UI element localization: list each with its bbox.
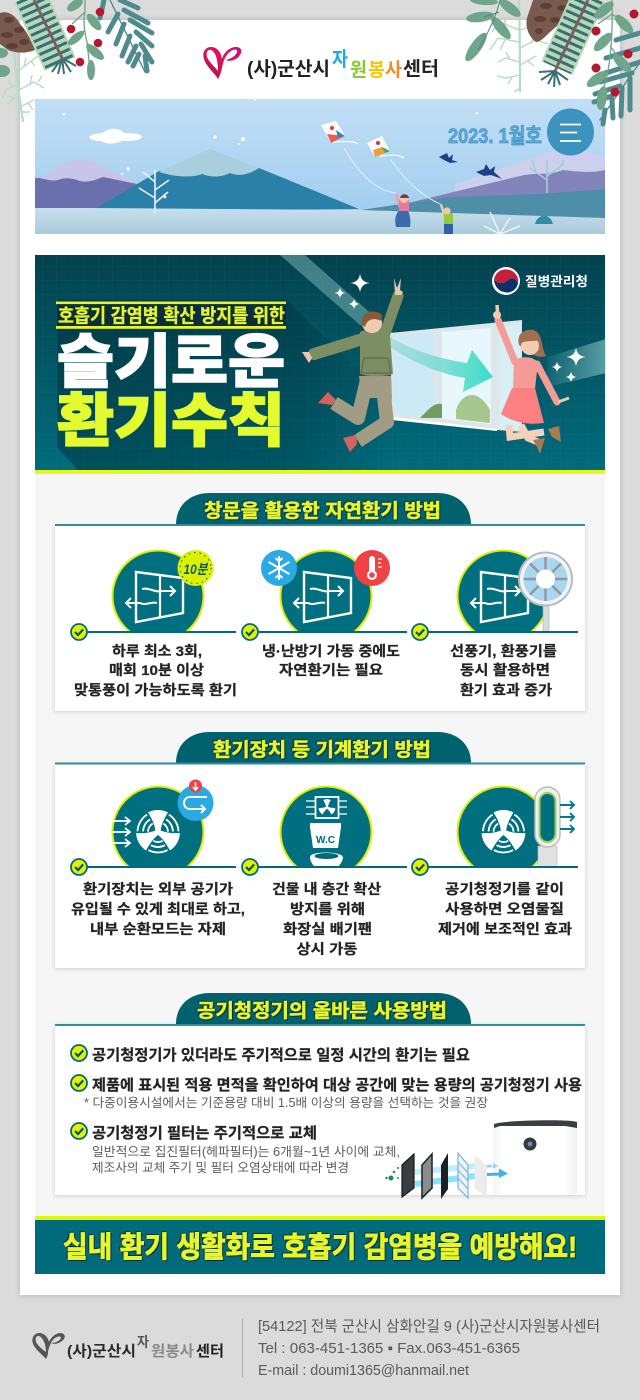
bottom message banner: 실내 환기 생활화로 호흡기 감염병을 예방해요! xyxy=(63,1231,577,1264)
section 2 heading tab xyxy=(176,732,471,763)
footer logo name: 원봉사 xyxy=(151,1343,194,1360)
text: item 1: 하루 최소 3회, xyxy=(112,643,202,659)
pine cone xyxy=(526,0,573,42)
item 2: toilet exhaust circle: W.C xyxy=(316,835,335,846)
footer logo name: (사)군산시 xyxy=(67,1343,136,1360)
text: item 3: 제거에 보조적인 효과 xyxy=(438,921,572,937)
mountains right xyxy=(455,145,605,200)
logo name: 원 xyxy=(350,59,367,81)
icon: 10 minute badge: 10분 xyxy=(184,561,208,577)
berries xyxy=(592,10,638,96)
tree right xyxy=(530,160,564,193)
text: item 1 xyxy=(71,881,245,937)
green sprig xyxy=(65,0,106,80)
text: item 3: 환기 효과 증가 xyxy=(460,682,552,698)
logo name: 센터 xyxy=(403,58,439,80)
title banner xyxy=(35,255,606,474)
text: item 2: 화장실 배기팬 xyxy=(283,921,372,937)
text: item 2: 상시 가동 xyxy=(296,941,358,957)
rule 2: 제품에 표시된 적용 면적을 확인하여 대상 공간에 맞는 용량의 공기청정기 사용 xyxy=(92,1077,582,1094)
kdca logo xyxy=(492,267,588,295)
text: item 2: 건물 내 층간 확산 xyxy=(272,881,381,897)
panel: mechanical ventilation xyxy=(55,762,585,968)
text: item 2: 자연환기는 필요 xyxy=(279,662,383,678)
logo name xyxy=(247,48,439,81)
rule 3 detail xyxy=(92,1145,400,1175)
boy xyxy=(441,205,453,234)
air flow arrows xyxy=(415,1163,508,1184)
footer contact text: E-mail : doumi1365@hanmail.net xyxy=(258,1362,470,1379)
text: item 3: 동시 활용하면 xyxy=(460,662,550,678)
text: item 1: 유입될 수 있게 최대로 하고, xyxy=(71,901,245,917)
text: item 1: 매회 10분 이상 xyxy=(109,662,204,678)
sub title xyxy=(56,301,286,329)
wind arrow xyxy=(390,337,493,392)
main title: yellow: 환기수칙 xyxy=(57,389,285,454)
bottom message banner xyxy=(35,1216,605,1274)
footer contact text xyxy=(258,1318,600,1379)
kite 2 xyxy=(367,136,404,158)
large leaves xyxy=(462,0,523,64)
item 2: toilet exhaust circle xyxy=(280,786,372,878)
dividers and checks row xyxy=(71,624,578,640)
footer xyxy=(32,1318,600,1379)
sub title: 호흡기 감염병 확산 방지를 위한 xyxy=(58,305,285,327)
text: item 2: 냉·난방기 가동 중에도 xyxy=(262,643,400,659)
girl in hanbok xyxy=(395,194,410,227)
sparkles xyxy=(334,274,586,382)
woman jumping xyxy=(493,305,569,454)
footer logo name: 자 xyxy=(137,1334,149,1350)
section 3 heading tab xyxy=(176,993,471,1024)
right beam xyxy=(547,339,606,387)
item 3: vent circle xyxy=(456,786,541,866)
snowy ground xyxy=(35,208,605,234)
section 1 heading tab xyxy=(176,493,471,525)
footer contact text: [54122] 전북 군산시 삼화안길 9 (사)군산시자원봉사센터 xyxy=(258,1318,600,1335)
rule 3 detail: 일반적으로 집진필터(헤파필터)는 6개월~1년 사이에 교체, xyxy=(92,1145,400,1159)
bush and shrubs xyxy=(535,216,553,224)
text: item 3: 사용하면 오염물질 xyxy=(445,901,564,917)
text: item 3 xyxy=(438,881,572,937)
filters xyxy=(402,1153,487,1199)
green sprig xyxy=(584,0,636,111)
green dust dots xyxy=(385,1167,399,1180)
date label: 2023. 1월호 xyxy=(448,125,542,148)
rule 3 detail: 제조사의 교체 주기 및 필터 오염상태에 따라 변경 xyxy=(92,1161,349,1175)
footer logo xyxy=(32,1333,224,1360)
kite strings xyxy=(344,148,442,205)
icon: electric fan xyxy=(519,552,572,632)
text: item 2 xyxy=(272,881,381,957)
section 1 heading tab: 창문을 활용한 자연환기 방법 xyxy=(204,500,441,522)
text: item 2 xyxy=(262,643,400,678)
text: item 3: 공기청정기를 같이 xyxy=(445,881,564,897)
logo name: 사 xyxy=(385,59,403,81)
side leaves xyxy=(0,48,8,58)
berries xyxy=(67,8,104,66)
icon: snowflake xyxy=(261,550,297,586)
footer contact text: Tel : 063-451-1365 ▪ Fax.063-451-6365 xyxy=(258,1340,520,1357)
logo name: (사)군산시 xyxy=(247,58,330,80)
kite 1 xyxy=(321,121,358,144)
pine branch xyxy=(539,0,589,87)
purifier body xyxy=(493,1120,577,1195)
cloud xyxy=(89,129,142,144)
text: item 3 xyxy=(450,643,557,698)
fern xyxy=(490,0,548,92)
icon: thermometer xyxy=(354,550,390,586)
header logo xyxy=(203,47,439,81)
logo name: 봉 xyxy=(368,59,385,81)
item 2: circle and window icon xyxy=(280,550,372,642)
snow dots xyxy=(63,98,478,198)
text: item 1: 환기장치는 외부 공기가 xyxy=(83,881,233,897)
icon: footer heart xyxy=(32,1333,65,1359)
text: item 2: 방지를 위해 xyxy=(290,901,365,917)
text: item 3: 선풍기, 환풍기를 xyxy=(450,643,557,659)
logo name: 자 xyxy=(332,48,348,71)
teal frond xyxy=(594,33,640,124)
illustration: air purifier and filters xyxy=(385,1120,577,1199)
item 3: circle and window icon xyxy=(456,550,543,631)
text: item 1: 내부 순환모드는 자제 xyxy=(90,921,226,937)
menu button xyxy=(547,108,594,156)
decoration: top right foliage xyxy=(462,0,640,124)
icon: 10 minute badge xyxy=(178,550,214,586)
window xyxy=(390,320,522,432)
rule 3: 공기청정기 필터는 주기적으로 교체 xyxy=(92,1125,317,1142)
footer logo name: 센터 xyxy=(196,1343,224,1360)
section 3 heading tab: 공기청정기의 올바른 사용방법 xyxy=(197,1000,447,1022)
hero banner: winter landscape xyxy=(35,98,605,234)
pine cone xyxy=(0,12,35,53)
item 1: vent circle xyxy=(112,786,204,866)
pine branch xyxy=(30,0,76,74)
rule 1: 공기청정기가 있더라도 주기적으로 일정 시간의 환기는 필요 xyxy=(92,1047,470,1064)
text: item 1: 맞통풍이 가능하도록 환기 xyxy=(74,682,237,698)
fern xyxy=(2,50,44,122)
icon: bladeless purifier xyxy=(535,787,574,867)
kdca logo: 질병관리청 xyxy=(525,274,588,289)
main title: white: 슬기로운 xyxy=(57,330,285,395)
tree left xyxy=(139,170,169,213)
rule 2 note: * 다중이용시설에서는 기준용량 대비 1.5배 이상의 용량을 선택하는 것을 권장 xyxy=(84,1096,489,1110)
dividers and checks row xyxy=(71,859,578,875)
light beam xyxy=(280,255,393,333)
panel: air purifier usage xyxy=(55,1024,585,1195)
teal frond xyxy=(100,0,152,72)
light content background xyxy=(35,473,605,1216)
mountains left xyxy=(35,160,137,190)
icon: recirculation badge xyxy=(178,780,214,821)
decoration: top left foliage xyxy=(0,0,152,122)
text: item 1 xyxy=(74,643,237,698)
panel: natural ventilation xyxy=(55,524,585,711)
mountain center xyxy=(90,168,359,212)
section 2 heading tab: 환기장치 등 기계환기 방법 xyxy=(213,739,431,761)
birds xyxy=(439,153,458,163)
item 1: circle and window icon xyxy=(112,550,204,642)
icon: heart logo xyxy=(203,47,241,79)
man jumping xyxy=(302,278,403,452)
title long shadow xyxy=(57,300,390,470)
footer logo name xyxy=(67,1334,224,1360)
